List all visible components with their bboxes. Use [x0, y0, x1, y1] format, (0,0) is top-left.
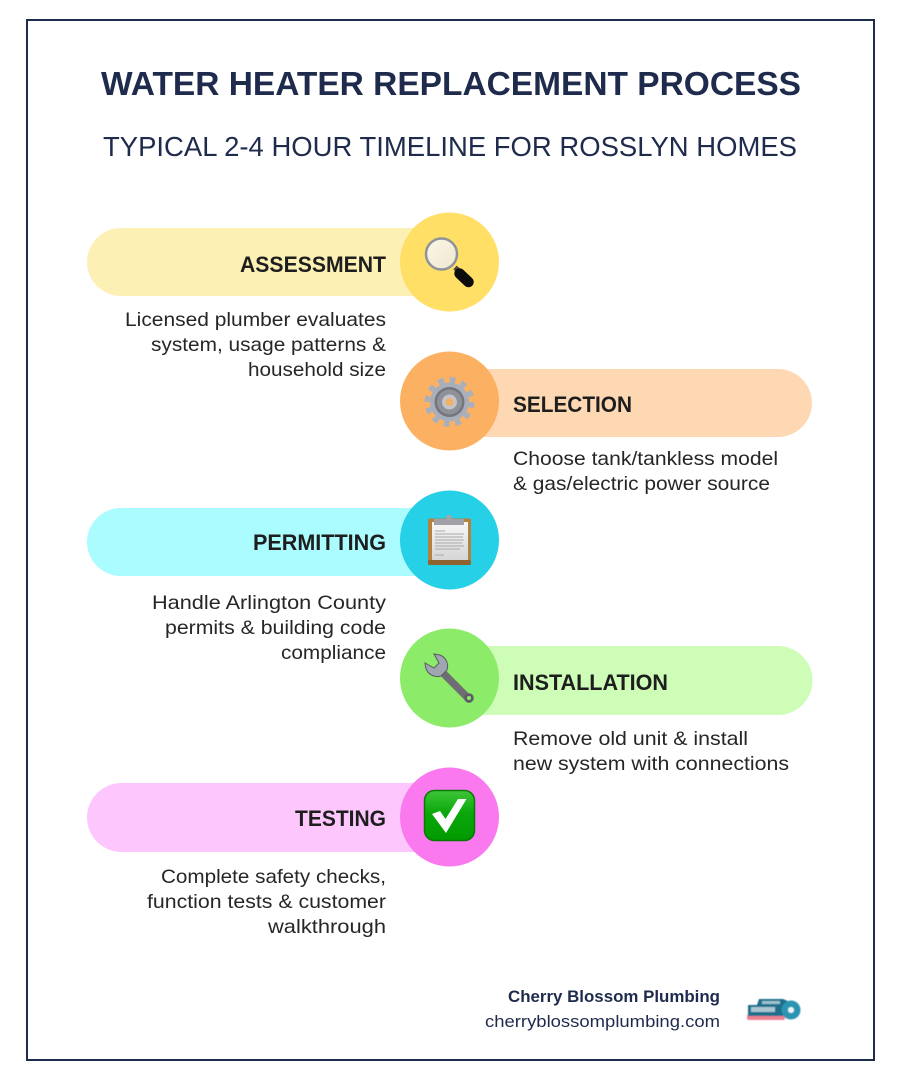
assessment circle — [400, 212, 499, 312]
permitting description: permits & building code — [165, 617, 386, 639]
icon: gear — [428, 380, 471, 424]
testing circle — [400, 768, 499, 866]
selection description: Choose tank/tankless model — [513, 448, 778, 470]
permitting label: PERMITTING — [253, 530, 386, 555]
permitting description: compliance — [281, 642, 386, 664]
assessment description: Licensed plumber evaluates — [125, 309, 386, 331]
step 4: installation — [400, 628, 813, 775]
logo — [747, 999, 800, 1020]
selection label: SELECTION — [513, 392, 632, 417]
selection pill — [449, 369, 812, 437]
permitting circle — [400, 490, 499, 590]
installation description: new system with connections — [513, 753, 789, 775]
selection circle — [400, 352, 499, 450]
footer website: cherryblossomplumbing.com — [485, 1012, 720, 1031]
assessment label: ASSESSMENT — [240, 252, 387, 277]
testing description: function tests & customer — [147, 891, 387, 913]
installation label: INSTALLATION — [513, 670, 668, 695]
testing label: TESTING — [295, 806, 386, 831]
installation circle — [400, 628, 499, 728]
step 1: assessment — [87, 212, 499, 381]
icon: check mark — [424, 790, 474, 840]
selection description: & gas/electric power source — [513, 473, 770, 495]
testing description — [147, 866, 387, 938]
assessment description — [125, 309, 386, 381]
icon: magnifying glass — [426, 238, 468, 282]
subtitle: TYPICAL 2-4 HOUR TIMELINE FOR ROSSLYN HOMES — [103, 131, 797, 162]
step 5: testing — [87, 768, 499, 938]
step 2: selection — [400, 352, 812, 495]
step 3: permitting — [87, 490, 499, 664]
selection description — [513, 448, 778, 495]
assessment pill — [87, 228, 449, 296]
testing description: Complete safety checks, — [161, 866, 386, 888]
installation pill — [449, 646, 813, 715]
testing description: walkthrough — [267, 916, 386, 938]
assessment description: system, usage patterns & — [151, 334, 386, 356]
icon: wrench — [425, 654, 474, 703]
permitting pill — [87, 508, 449, 576]
testing pill — [87, 783, 449, 852]
installation description: Remove old unit & install — [513, 728, 748, 750]
assessment description: household size — [248, 359, 386, 381]
title: WATER HEATER REPLACEMENT PROCESS — [101, 65, 801, 102]
installation description — [513, 728, 789, 775]
icon: clipboard — [428, 515, 471, 565]
footer company name: Cherry Blossom Plumbing — [508, 987, 720, 1006]
permitting description — [152, 592, 386, 664]
permitting description: Handle Arlington County — [152, 592, 386, 614]
